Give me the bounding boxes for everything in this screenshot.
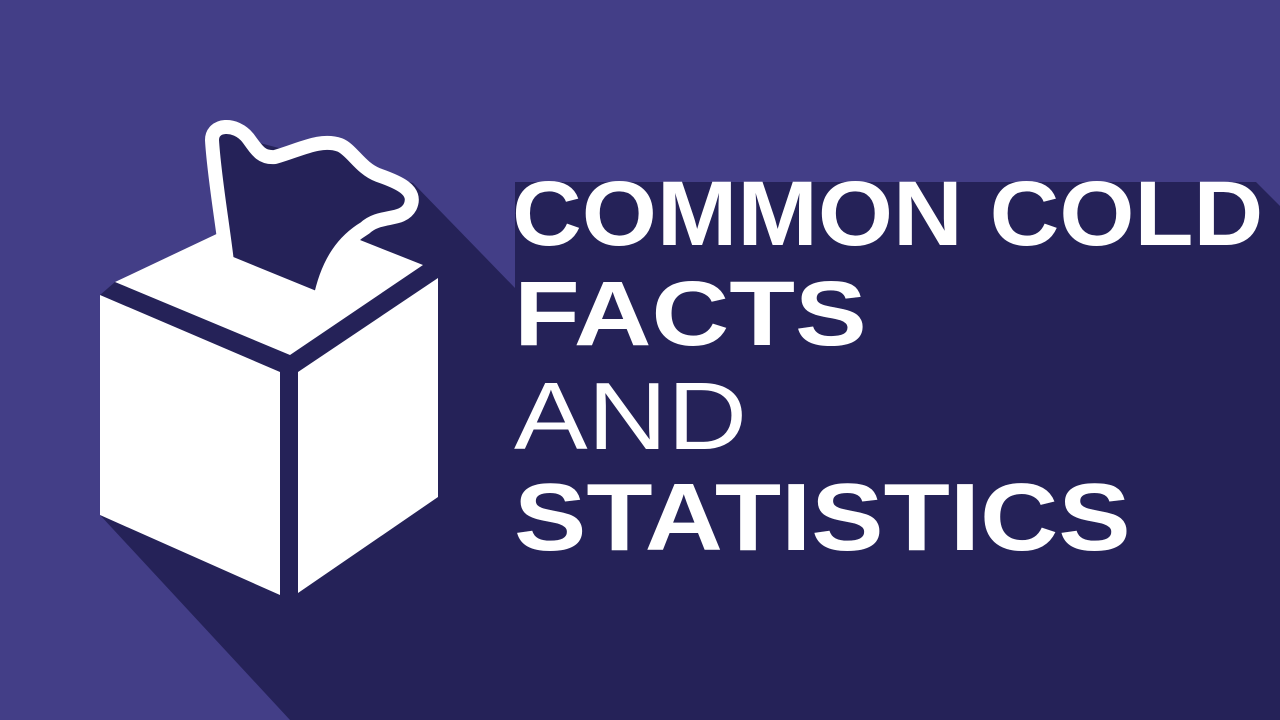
title line 3: AND [514, 363, 747, 470]
title line 2: FACTS [514, 263, 867, 365]
title line 1: COMMON COLD [512, 163, 1263, 265]
box top face [115, 230, 423, 355]
tissue [212, 127, 412, 300]
box right face [298, 278, 438, 593]
title line 4: STATISTICS [514, 464, 1131, 571]
box left face [100, 295, 280, 595]
